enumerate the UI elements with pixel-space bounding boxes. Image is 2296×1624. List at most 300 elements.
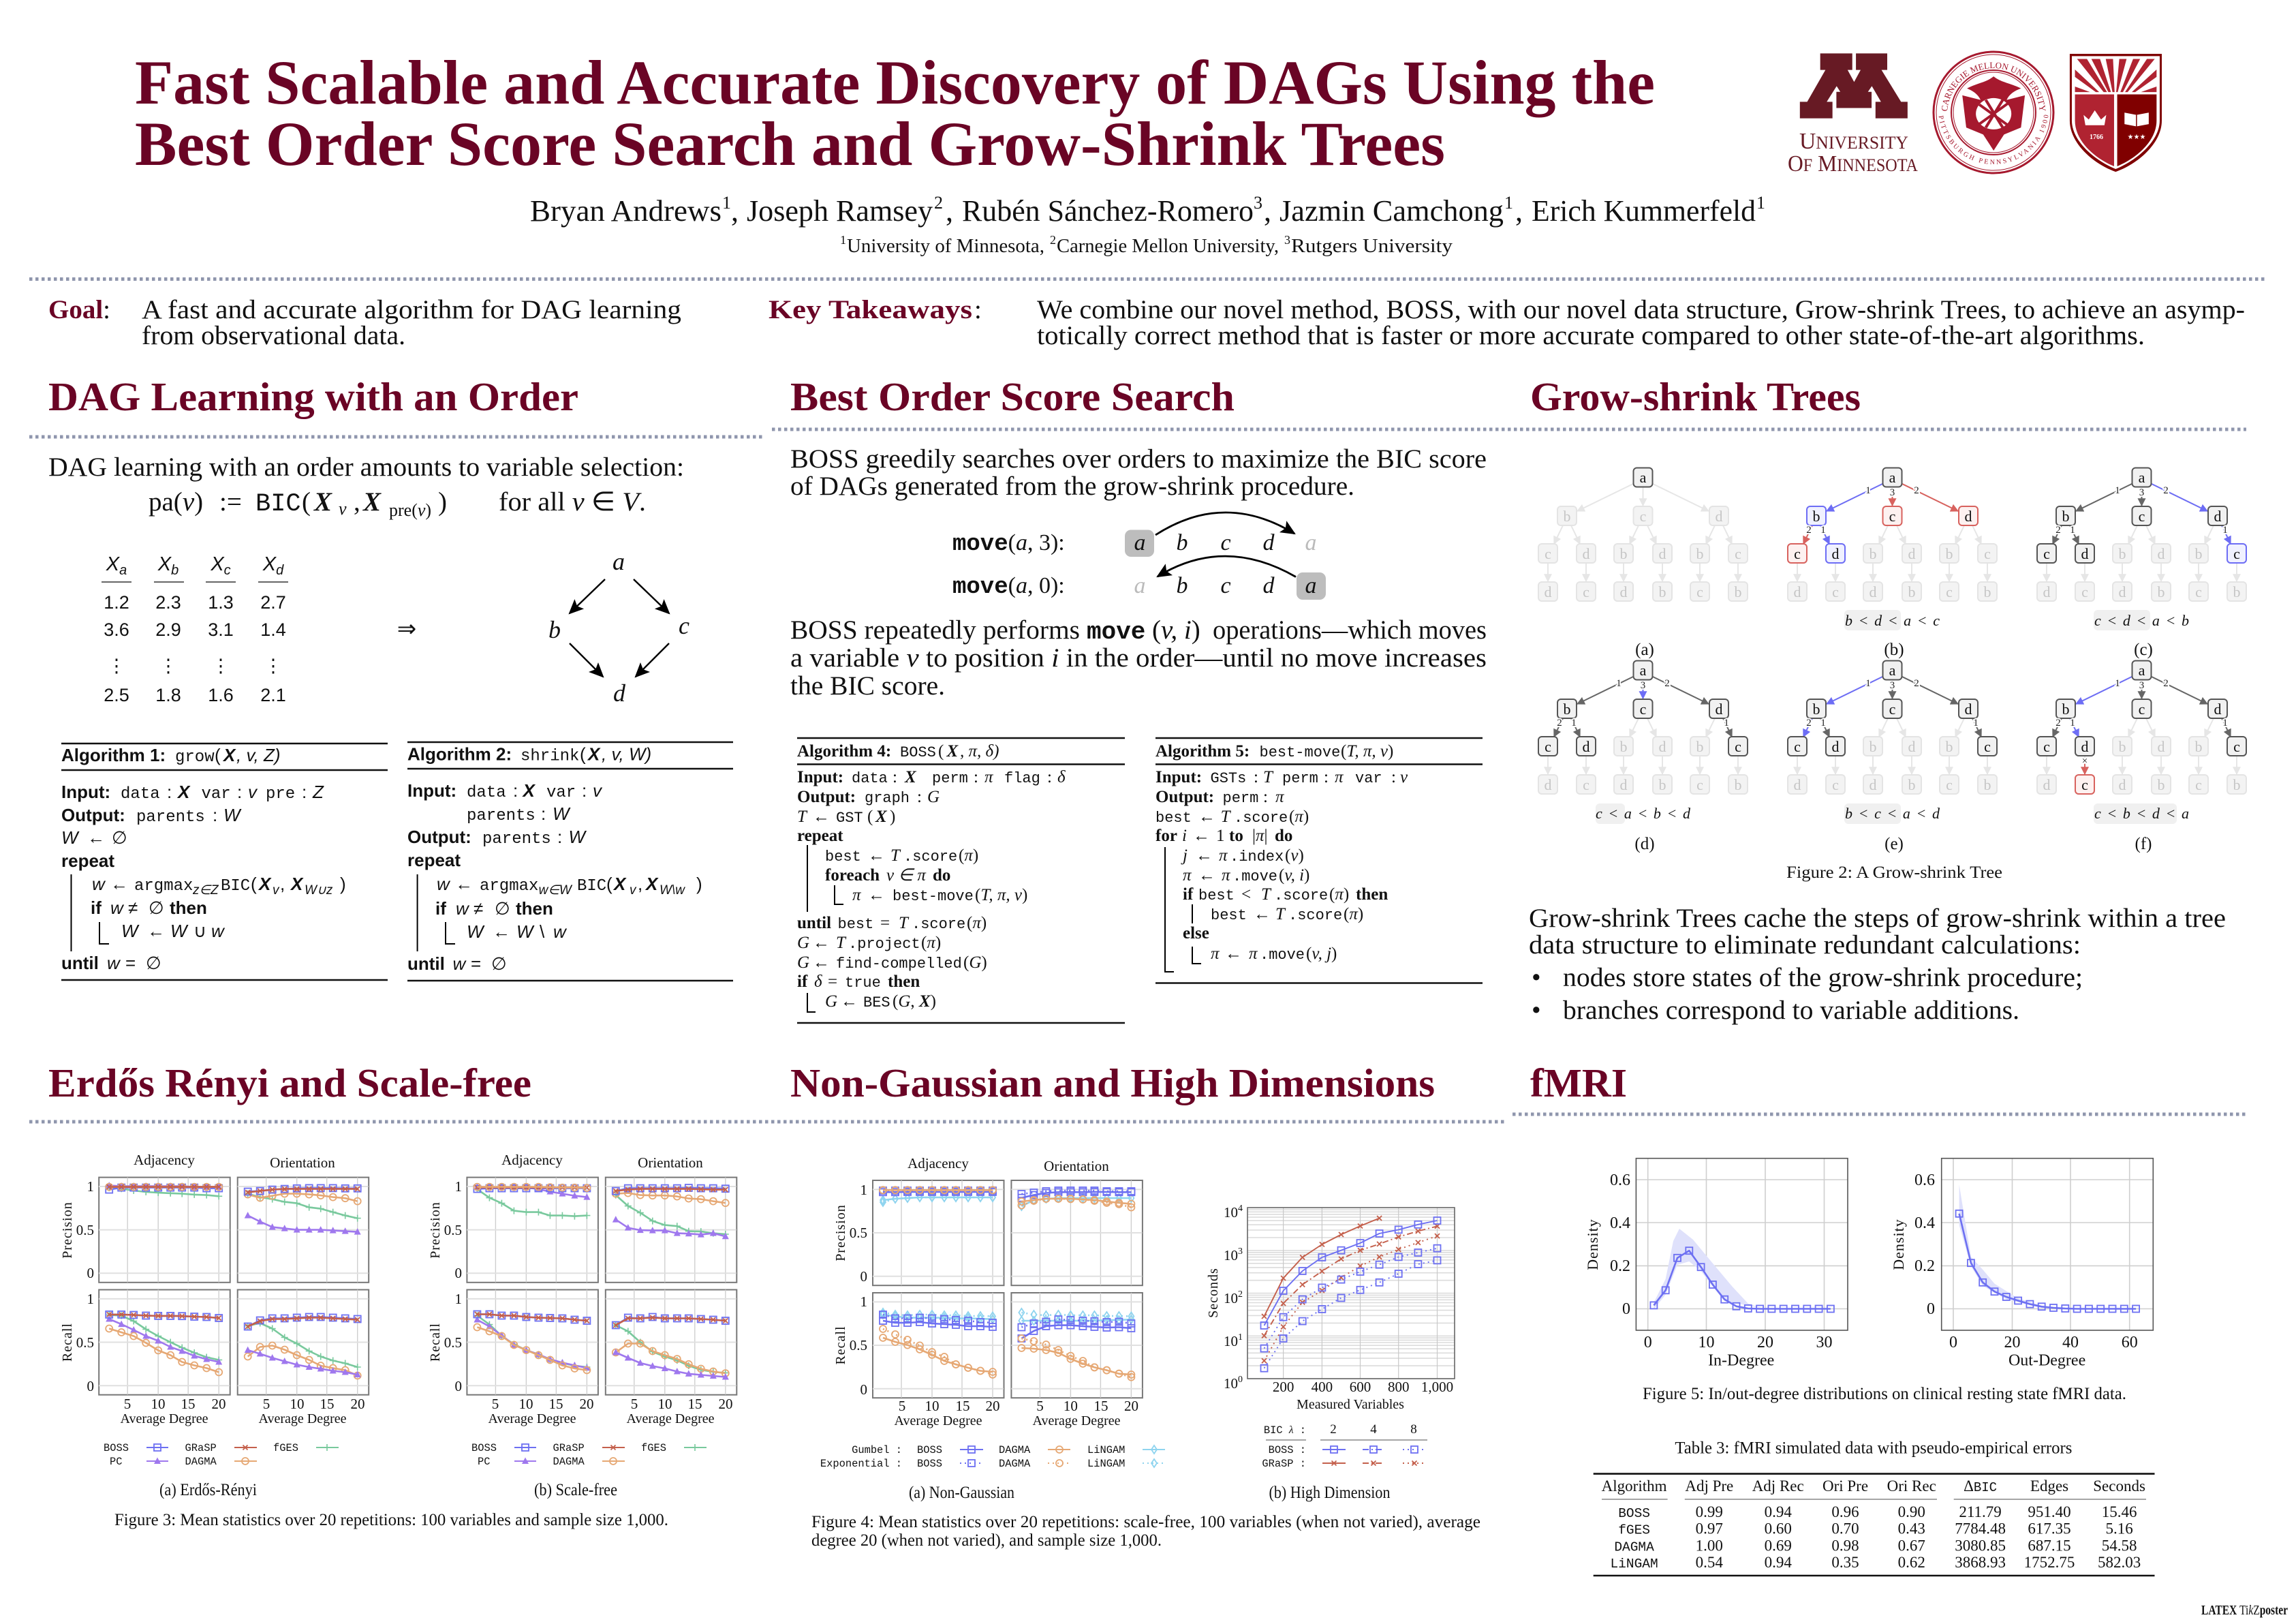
- table: fMRI results: Ori Rec: [1887, 1477, 1936, 1495]
- chart: in-degree density: 30: [1816, 1334, 1833, 1351]
- table: fMRI results: 0.43: [1898, 1520, 1925, 1537]
- algorithm 2: shrink: parents: [482, 830, 551, 848]
- figure 2: tree b: b: [1812, 508, 1820, 525]
- algorithm 5: best-move: best: [1211, 907, 1247, 924]
- legend: figure 4b: BIC λ :: [1264, 1424, 1306, 1437]
- algorithm 2: shrink: W\w: [660, 883, 685, 898]
- text: grow-shrink tree description: •: [1532, 996, 1541, 1025]
- algorithm 2: shrink: repeat: [407, 850, 461, 870]
- algorithm 2: shrink: v: [630, 883, 637, 898]
- panel: key takeaways: We combine our novel method, BOSS, with our novel data structure, Grow-shrink Trees, to achieve an asymp-: [1037, 295, 2245, 324]
- algorithm 2: shrink: (: [580, 744, 586, 765]
- algorithm 2: shrink: Algorithm 2:: [407, 744, 512, 765]
- formula: parent selection: v: [339, 499, 347, 519]
- table: example data: 1.2: [104, 592, 129, 613]
- algorithm 1: grow: , v, Z): [236, 745, 281, 765]
- algorithm 1: grow: v: [248, 782, 258, 802]
- chart: figure 4a non-Gaussian: 0: [860, 1268, 867, 1285]
- algorithm 5: best-move: (v, i): [1279, 866, 1309, 885]
- chart: figure 4b high dimension: 200: [1273, 1379, 1294, 1395]
- caption: figure 4: degree 20 (when not varied), and sample size 1,000.: [811, 1531, 1162, 1550]
- algorithm 2: shrink: ←: [455, 874, 473, 894]
- algorithm 4: BOSS: Input:: [797, 768, 843, 786]
- legend: figure 3b: fGES: [641, 1442, 666, 1454]
- text: grow-shrink tree description: data structure to eliminate redundant calculations:: [1529, 930, 2081, 960]
- formula: parent selection: pa(v): [149, 487, 203, 517]
- chart: figure 4a non-Gaussian: Average Degree: [1033, 1413, 1121, 1428]
- table: example data: 2.3: [155, 592, 181, 613]
- figure 2: tree b: a: [1889, 469, 1896, 486]
- algorithm 5: best-move: Input:: [1155, 768, 1202, 786]
- chart: figure 4b high dimension: [1206, 1204, 1455, 1502]
- chart: in-degree density: 0.2: [1610, 1257, 1630, 1275]
- algorithm 1: grow: Algorithm 1:: [61, 745, 166, 765]
- text: BOSS move description: BOSS repeatedly performs: [790, 615, 1080, 645]
- diagram: move operations: d: [1263, 530, 1275, 555]
- figure 2: tree d: d: [1544, 776, 1552, 793]
- figure 2: tree e: b: [1908, 776, 1916, 793]
- figure 2: tree e: 2: [1806, 718, 1812, 729]
- table: example data: d: [276, 563, 284, 578]
- chart: figure 4b high dimension: 10: [1224, 1204, 1238, 1221]
- algorithm 5: best-move: v: [1400, 768, 1408, 786]
- legend: figure 3a: DAGMA: [185, 1456, 217, 1468]
- chart: out-degree density: [1890, 1159, 2153, 1370]
- algorithm 1: grow: X: [290, 874, 304, 894]
- algorithm 1: grow: ←: [110, 874, 128, 894]
- chart: figure 4a non-Gaussian: 1: [860, 1293, 867, 1310]
- legend: figure 3b: DAGMA: [553, 1456, 585, 1468]
- figure 2: tree c: c: [2195, 583, 2202, 600]
- footer: LaTeX TikZposter: LATEX TikZposter: [2201, 1603, 2288, 1618]
- algorithm 4: BOSS: BOSS: [900, 744, 936, 761]
- algorithm 4: BOSS: Algorithm 4:: [797, 742, 891, 761]
- algorithm 4: BOSS: do: [933, 866, 950, 885]
- table: fMRI results: 0.67: [1898, 1537, 1925, 1554]
- algorithm 5: best-move: ←: [1196, 846, 1213, 865]
- figure 2: tree a: (a): [1635, 641, 1654, 659]
- algorithm 1: grow: grow: [175, 748, 215, 767]
- chart: out-degree density: 0.6: [1914, 1171, 1935, 1189]
- algorithm 4: BOSS: :: [1047, 768, 1052, 786]
- algorithm 1: grow: pre: [266, 785, 295, 803]
- table: example data: ⋮: [211, 656, 230, 676]
- chart: figure 3a Erdos-Renyi: [60, 1152, 369, 1499]
- chart: figure 3b scale-free: 5: [631, 1396, 638, 1412]
- algorithm 4: BOSS: .project: [848, 936, 920, 953]
- chart: figure 3b scale-free: [428, 1152, 736, 1499]
- algorithm 5: best-move: π: [1275, 788, 1285, 806]
- figure 2: tree f: b: [2062, 701, 2070, 718]
- figure 2: tree d: c: [1696, 776, 1703, 793]
- figure 2: tree d: c: [1583, 776, 1589, 793]
- chart: figure 4b high dimension: 10: [1224, 1247, 1238, 1263]
- algorithm 4: BOSS: true: [845, 975, 881, 992]
- algorithm 1: grow: W: [223, 805, 242, 825]
- chart: out-degree density: Out-Degree: [2008, 1352, 2085, 1370]
- chart: figure 3b scale-free: 15: [549, 1396, 563, 1412]
- figure 2: tree e: 1: [1820, 718, 1826, 729]
- formula: parent selection: pre(v): [389, 500, 431, 520]
- figure 2: tree c: b: [2062, 508, 2070, 525]
- algorithm 2: shrink: :: [513, 780, 518, 801]
- algorithm 4: BOSS: ←: [868, 886, 885, 904]
- figure 2: tree a: c: [1640, 508, 1647, 525]
- table: example data: X: [106, 553, 119, 575]
- chart: figure 3a Erdos-Renyi: 1: [87, 1178, 94, 1195]
- figure 2: tree f: c: [2043, 738, 2050, 755]
- figure 2: tree d: 2: [1664, 678, 1670, 689]
- text: BOSS move description: move: [1087, 618, 1145, 646]
- algorithm 4: BOSS: T: [836, 934, 847, 952]
- formula: parent selection: :=: [219, 487, 242, 517]
- algorithm 4: BOSS: π: [852, 886, 862, 904]
- chart: in-degree density: 20: [1757, 1334, 1773, 1351]
- algorithm 5: best-move: j: [1181, 846, 1188, 865]
- legend: figure 4a: LiNGAM: [1087, 1444, 1125, 1456]
- table: example data: ⋮: [159, 656, 177, 676]
- chart: out-degree density: 0.4: [1914, 1214, 1935, 1232]
- algorithm 5: best-move: for: [1155, 827, 1177, 845]
- title: Best Order Score Search and Grow-Shrink Trees: [135, 109, 1445, 179]
- figure 2: tree d: 2: [1557, 718, 1562, 729]
- figure 2: tree e: d: [1965, 701, 1972, 718]
- chart: in-degree density: 0.6: [1610, 1171, 1630, 1189]
- affiliations: Rutgers University: [1291, 235, 1453, 257]
- chart: in-degree density: Density: [1584, 1219, 1601, 1270]
- legend: figure 3b: [471, 1442, 707, 1468]
- title: Fast Scalable and Accurate Discovery of DAGs Using the: [135, 48, 1655, 117]
- figure 2: tree e: d: [1793, 776, 1801, 793]
- algorithm 5: best-move: GSTs: [1210, 770, 1246, 787]
- table: example data: 3.6: [104, 619, 129, 640]
- figure 2: tree a: b: [1735, 583, 1741, 600]
- formula: parent selection: BIC: [255, 490, 301, 519]
- algorithm 1: grow: :: [213, 805, 217, 825]
- figure 2: tree d: a: [1640, 662, 1647, 679]
- algorithm 2: shrink: w: [452, 953, 467, 974]
- algorithm 2: shrink: :: [541, 803, 546, 824]
- figure 2: tree e: (e): [1884, 835, 1904, 853]
- chart: out-degree density: 20: [2004, 1334, 2021, 1351]
- algorithm 2: shrink: v: [593, 780, 603, 801]
- table: fMRI results: 0.99: [1696, 1503, 1723, 1520]
- figure 2: tree c: b: [2233, 583, 2240, 600]
- chart: figure 4b high dimension: 600: [1350, 1379, 1371, 1395]
- algorithm 4: BOSS: =: [880, 914, 890, 932]
- diagram: move operations: a: [1134, 573, 1146, 598]
- chart: figure 4a non-Gaussian: 0.5: [850, 1337, 867, 1353]
- algorithm 5: best-move: .move: [1232, 868, 1277, 885]
- algorithm 5: best-move: .index: [1230, 848, 1284, 865]
- algorithm 5: best-move: (π): [1329, 885, 1349, 904]
- algorithm 1: grow: ∅: [146, 953, 161, 973]
- algorithm 1: grow: var: [202, 785, 231, 803]
- diagram: DAG a b c d: b: [548, 616, 561, 643]
- figure 2: tree e: c: [1794, 738, 1801, 755]
- figure 2: tree d: (d): [1634, 835, 1655, 853]
- table: fMRI results: 211.79: [1959, 1503, 2002, 1520]
- diagram: DAG a b c d: [548, 548, 689, 707]
- algorithm 2: shrink: argmax: [480, 877, 538, 895]
- figure 2: tree a: b: [1620, 545, 1627, 562]
- diagram: move operations: b: [1176, 573, 1188, 598]
- caption: table 3: Table 3: fMRI simulated data with pseudo-empirical errors: [1675, 1439, 2072, 1458]
- diagram: move operations: a: [1134, 530, 1146, 555]
- figure 2: tree e: b: [1984, 776, 1991, 793]
- algorithm 2: shrink: data: [467, 784, 506, 802]
- panel: key takeaways: totically correct method that is faster or more accurate compared to other state-of-the-art algorithms.: [1037, 321, 2145, 350]
- algorithm 4: BOSS: δ: [1057, 768, 1066, 786]
- chart: figure 3a Erdos-Renyi: 5: [263, 1396, 270, 1412]
- figure 2: tree d: b: [1735, 776, 1741, 793]
- chart: figure 3a Erdos-Renyi: 10: [151, 1396, 165, 1412]
- figure 2: tree b: c: [1946, 583, 1953, 600]
- algorithm 2: shrink: ≠: [474, 898, 483, 919]
- table: example data: X: [158, 553, 171, 575]
- table: fMRI results: 3868.93: [1955, 1554, 2006, 1571]
- table: fMRI results: 3080.85: [1955, 1537, 2006, 1554]
- algorithm 4: BOSS: ←: [813, 953, 830, 972]
- text: grow-shrink tree description: [1529, 904, 2226, 1025]
- algorithm 1: grow: :: [237, 782, 242, 802]
- algorithm 2: shrink: \: [540, 921, 545, 942]
- figure 2: tree e: d: [1908, 738, 1916, 755]
- figure 2: tree d: 1: [1724, 718, 1729, 729]
- algorithm 4: BOSS: T: [890, 846, 901, 865]
- algorithm 1: grow: X: [258, 874, 272, 894]
- authors: ,: [1264, 194, 1271, 228]
- figure 2: tree d: d: [1716, 701, 1722, 718]
- figure 2: tree b: 2: [1914, 485, 1919, 496]
- chart: figure 4b high dimension: 2: [1238, 1289, 1243, 1300]
- algorithm 2: shrink: ∅: [491, 953, 507, 974]
- chart: figure 3b scale-free: Adjacency: [501, 1152, 563, 1168]
- figure 2: tree f: 1: [2222, 718, 2228, 729]
- figure 2: tree f: a: [2139, 662, 2145, 679]
- chart: figure 3b scale-free: 0.5: [444, 1222, 462, 1238]
- panel: key takeaways: :: [974, 295, 982, 324]
- algorithm 4: BOSS: foreach: [825, 866, 880, 885]
- icon: Carnegie Mellon University seal: CARNEGIE MELLON UNIVERSITY: [1942, 63, 2045, 111]
- chart: figure 4b high dimension: 800: [1388, 1379, 1409, 1395]
- algorithm 1: grow: ,: [280, 874, 285, 894]
- algorithm 2: shrink: until: [407, 953, 445, 974]
- table: fMRI results: 0.94: [1765, 1554, 1792, 1571]
- panel: key takeaways: [769, 295, 2245, 350]
- algorithm 2: shrink: X: [612, 874, 627, 894]
- legend: figure 3b: GRaSP: [553, 1442, 585, 1454]
- table: fMRI results: 582.03: [2098, 1554, 2141, 1571]
- figure 2: tree d: b: [1563, 701, 1571, 718]
- caption: figure 2: Figure 2: A Grow-shrink Tree: [1786, 863, 2002, 882]
- authors: [530, 193, 1765, 228]
- diagram: move operations: move(a, 0):: [952, 573, 1065, 600]
- caption: figure 4: [811, 1513, 1480, 1550]
- table: fMRI results: Edges: [2030, 1477, 2068, 1495]
- algorithm 5: best-move: :: [1391, 768, 1396, 786]
- figure 2: tree c: c: [2233, 545, 2240, 562]
- legend: figure 4a: LiNGAM: [1087, 1458, 1125, 1470]
- diagram: move operations: move(a, 3):: [952, 530, 1065, 557]
- algorithm 4: BOSS: then: [888, 972, 920, 991]
- diagram: move operations: c: [1220, 530, 1231, 555]
- algorithm 4: BOSS: G: [797, 953, 809, 972]
- table: example data: ⋮: [108, 656, 125, 676]
- figure 2: tree b: d: [1793, 583, 1801, 600]
- algorithm 4: BOSS: find-compelled: [836, 955, 962, 972]
- table: example data: 1.8: [155, 685, 181, 705]
- figure 2: tree c: d: [2214, 508, 2221, 525]
- figure 2: tree f: c < b < d < a: [2094, 805, 2189, 822]
- figure 2: tree d: d: [1582, 738, 1590, 755]
- algorithm 1: grow: =: [125, 953, 136, 973]
- chart: out-degree density: 60: [2122, 1334, 2138, 1351]
- table: fMRI results: 54.58: [2102, 1537, 2137, 1554]
- algorithm 1: grow: w: [92, 874, 106, 894]
- algorithm 1: grow: X: [222, 745, 236, 765]
- figure 2: tree c: c: [2081, 583, 2088, 600]
- algorithm 4: BOSS: [797, 738, 1125, 1023]
- algorithm 1: grow: (: [215, 745, 221, 765]
- diagram: DAG a b c d: d: [613, 679, 626, 707]
- algorithm 2: shrink: ,: [638, 874, 642, 894]
- figure 2: tree f: ×: [2082, 756, 2088, 767]
- algorithm 1: grow: Z: [312, 782, 324, 802]
- algorithm 1: grow: ∅: [149, 898, 164, 918]
- algorithm 4: BOSS: δ: [814, 972, 822, 991]
- legend: figure 4a: BOSS: [917, 1444, 942, 1456]
- figure 2: tree b: b: [1870, 545, 1876, 562]
- algorithm 4: BOSS: v ∈ π: [886, 866, 927, 885]
- algorithm 2: shrink: :: [557, 827, 562, 847]
- chart: figure 4a non-Gaussian: 10: [925, 1398, 939, 1414]
- algorithm 4: BOSS: graph: [865, 790, 910, 807]
- algorithm 2: shrink: shrink: [521, 747, 579, 766]
- authors: Jazmin Camchong: [1279, 194, 1504, 228]
- legend: figure 4b: 8: [1410, 1422, 1417, 1437]
- figure 2: tree e: b: [1812, 701, 1820, 718]
- figure 2: tree e: 1: [1973, 718, 1979, 729]
- chart: figure 4b high dimension: 10: [1224, 1290, 1238, 1306]
- algorithm 1: grow: w: [110, 898, 125, 918]
- algorithm 4: BOSS: :: [974, 768, 978, 786]
- table: example data: 2.9: [155, 619, 181, 640]
- figure 2: tree c: 1: [2222, 525, 2228, 536]
- algorithm 1: grow: :: [167, 782, 172, 802]
- chart: figure 4a non-Gaussian: (a) Non-Gaussian: [909, 1484, 1014, 1502]
- table: fMRI results: 0.60: [1765, 1520, 1792, 1537]
- legend: figure 3b: PC: [478, 1456, 490, 1468]
- affiliations: Carnegie Mellon University,: [1057, 235, 1279, 257]
- algorithm 4: BOSS: (G): [963, 953, 987, 972]
- algorithm 4: BOSS: X: [904, 768, 917, 786]
- figure 2: tree b: 1: [1820, 525, 1826, 536]
- algorithm 2: shrink: X: [522, 780, 536, 801]
- algorithm 2: shrink: then: [516, 898, 553, 919]
- legend: figure 4a: [820, 1444, 1165, 1470]
- table: fMRI results: 15.46: [2102, 1503, 2137, 1520]
- diagram: move operations: b: [1176, 530, 1188, 555]
- icon: Rutgers shield: 1766: [2090, 134, 2103, 141]
- title: [135, 48, 1655, 179]
- algorithm 5: best-move: to: [1229, 827, 1243, 845]
- figure 2: tree d: c < a < b < d: [1596, 805, 1691, 822]
- algorithm 1: grow: if: [91, 898, 102, 918]
- figure 2: tree c: c: [2043, 545, 2050, 562]
- table: example data: 3.1: [208, 619, 234, 640]
- panel: goal: [48, 295, 681, 350]
- figure 2: tree a: d: [1620, 583, 1627, 600]
- table: example data: 1.6: [208, 685, 234, 705]
- chart: figure 4b high dimension: 1,000: [1421, 1379, 1453, 1395]
- algorithm 4: BOSS: ←: [813, 808, 830, 826]
- legend: figure 4b: BOSS :: [1269, 1444, 1306, 1456]
- icon: Carnegie Mellon University seal: [1932, 50, 2055, 174]
- table: example data: a: [119, 563, 127, 578]
- algorithm 5: best-move: T: [1261, 885, 1272, 904]
- algorithm 4: BOSS: (π): [967, 914, 987, 932]
- figure 2: tree a: c: [1583, 583, 1589, 600]
- figure 2: tree b: b: [1946, 545, 1953, 562]
- chart: figure 3b scale-free: 0: [455, 1265, 462, 1281]
- algorithm 4: BOSS: perm: [932, 770, 968, 787]
- figure 2: tree c: 3: [2139, 487, 2144, 498]
- figure 2: tree a: c: [1696, 583, 1703, 600]
- figure 2: tree a: b: [1696, 545, 1703, 562]
- chart: figure 3a Erdos-Renyi: Adjacency: [134, 1152, 195, 1168]
- algorithm 4: BOSS: (T, π, v): [975, 886, 1027, 904]
- algorithm 1: grow: BIC: [221, 877, 250, 895]
- icon: University of Minnesota logo: OF MINNESOTA: [1788, 151, 1918, 177]
- chart: figure 3b scale-free: 0: [455, 1378, 462, 1394]
- diagram: move operations: a: [1305, 573, 1316, 598]
- algorithm 5: best-move: Algorithm 5:: [1155, 742, 1250, 761]
- algorithm 1: grow: W: [170, 921, 189, 941]
- chart: figure 3a Erdos-Renyi: 20: [211, 1396, 226, 1412]
- table: example data: 2.1: [260, 685, 286, 705]
- panel: goal: Goal:: [48, 295, 110, 324]
- figure 2: tree c: d: [2119, 583, 2126, 600]
- algorithm 1: grow: ∪: [193, 921, 206, 941]
- algorithm 2: shrink: W: [553, 803, 571, 824]
- algorithm 4: BOSS: ): [890, 808, 895, 826]
- algorithm 5: best-move: .score: [1274, 887, 1328, 904]
- chart: figure 4a non-Gaussian: 15: [955, 1398, 970, 1414]
- chart: figure 3b scale-free: 15: [688, 1396, 702, 1412]
- figure 2: tree c: 2: [2055, 525, 2061, 536]
- figure 2: tree d: b: [1658, 776, 1666, 793]
- algorithm 4: BOSS: best: [838, 916, 873, 933]
- chart: figure 4a non-Gaussian: 1: [860, 1182, 867, 1198]
- table: fMRI results: Adj Rec: [1752, 1477, 1804, 1495]
- algorithm 2: shrink: , v, W): [602, 744, 651, 765]
- algorithm 5: best-move: π: [1249, 945, 1258, 963]
- authors: Joseph Ramsey: [747, 194, 933, 228]
- table: fMRI results: 0.69: [1765, 1537, 1792, 1554]
- text: BOSS move description: (v, i): [1152, 615, 1200, 645]
- algorithm 1: grow: [61, 744, 388, 980]
- chart: in-degree density: 10: [1698, 1334, 1714, 1351]
- algorithm 5: best-move: else: [1183, 924, 1209, 943]
- figure 2: tree e: b < c < a < d: [1845, 805, 1940, 822]
- algorithm 1: grow: Output:: [61, 805, 125, 825]
- algorithm 4: BOSS: X: [875, 808, 888, 826]
- figure 2: tree c: c: [2139, 508, 2145, 525]
- algorithm 5: best-move: (T, π, v): [1341, 742, 1393, 761]
- figure 2: tree f: 2: [2055, 718, 2061, 729]
- chart: figure 4b high dimension: 400: [1312, 1379, 1333, 1395]
